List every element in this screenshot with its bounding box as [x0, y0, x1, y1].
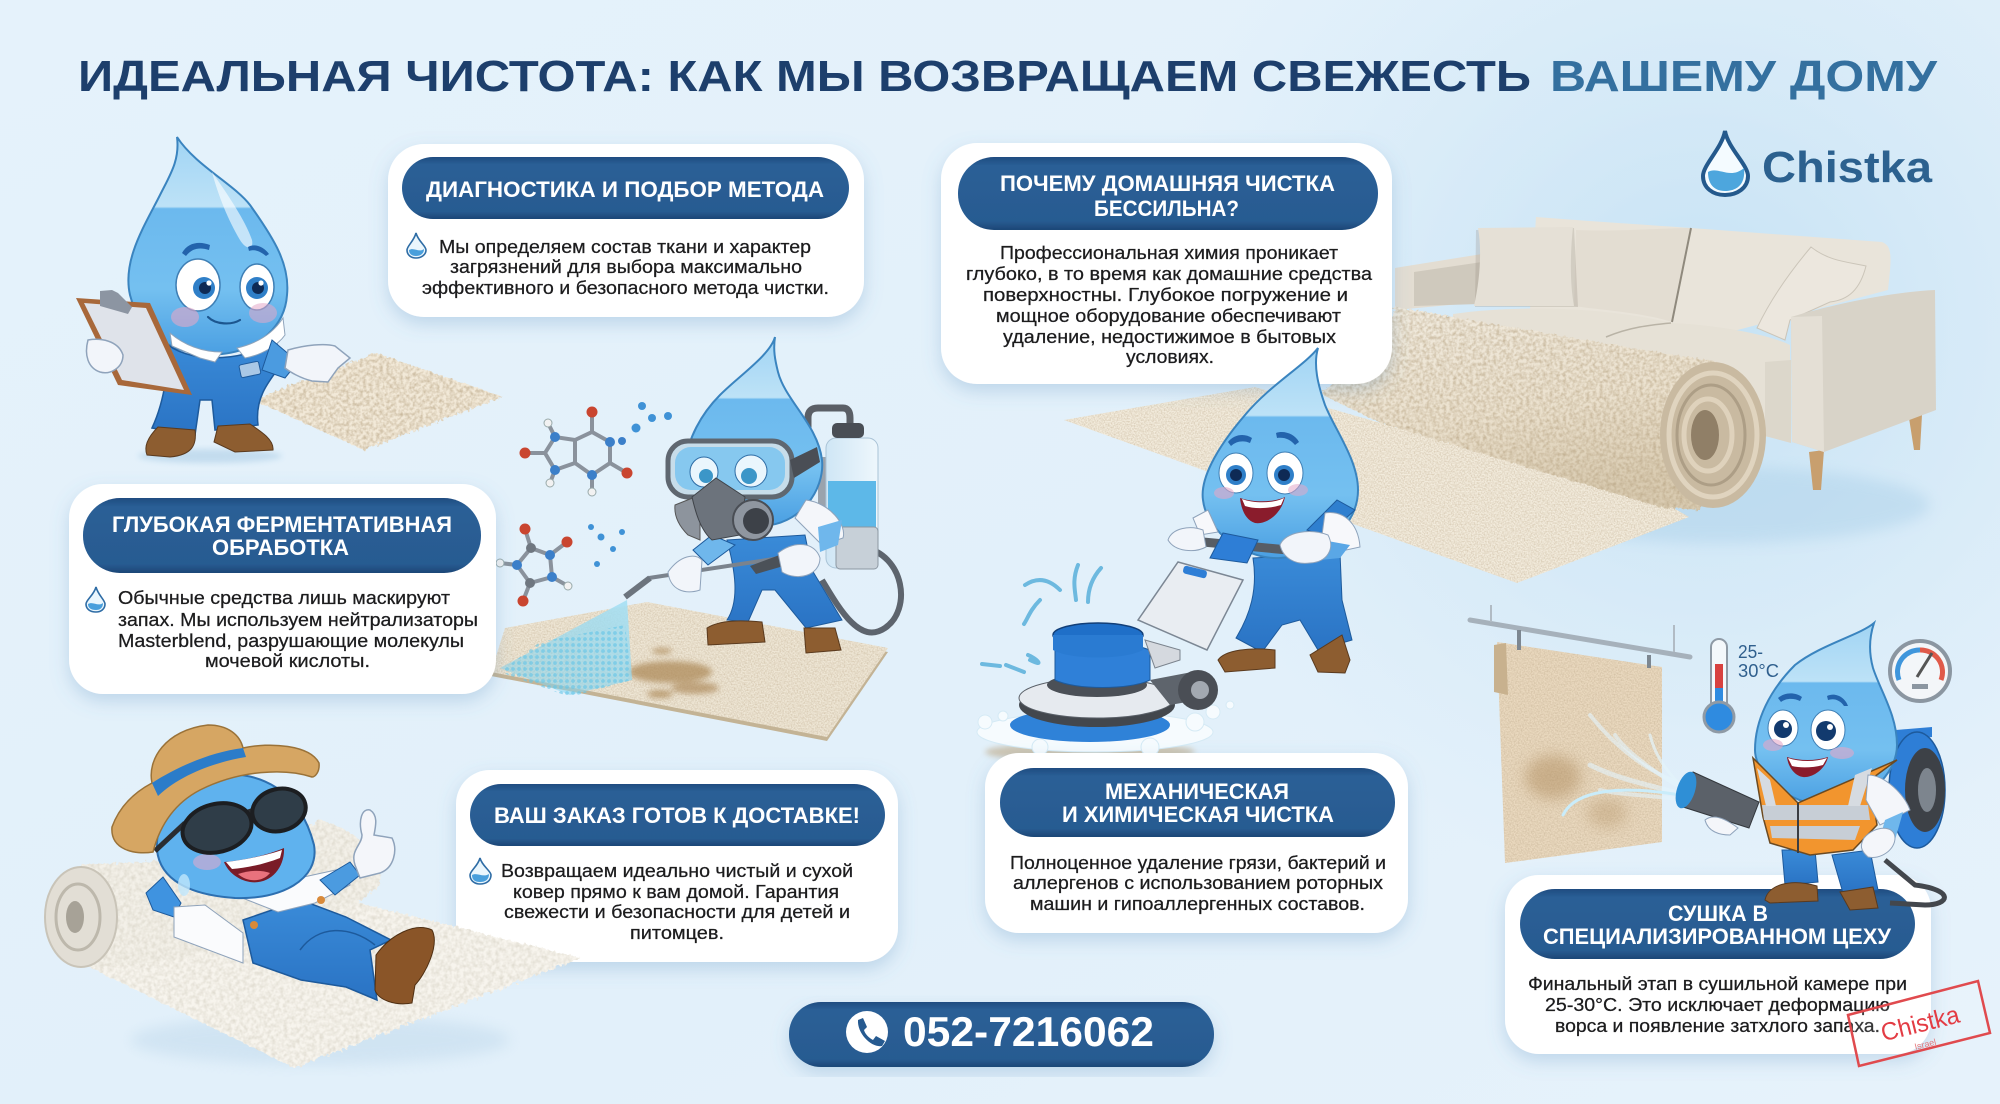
goggles and respirator [668, 441, 820, 540]
body text: питомцев. [630, 923, 724, 943]
clipboard [76, 290, 192, 395]
body text: Финальный этап в сушильной камере при [1528, 974, 1907, 994]
body text: Masterblend, разрушающие молекулы [118, 631, 464, 651]
molecule: upper [520, 406, 632, 496]
icon: water drop [470, 858, 491, 884]
drop body [1203, 348, 1358, 558]
thermometer: 30°C [1738, 661, 1779, 681]
body text: Полноценное удаление грязи, бактерий и [1010, 853, 1386, 873]
glove holding clipboard [86, 339, 123, 373]
boot sole [375, 928, 434, 1004]
face [1214, 432, 1308, 523]
heading pill [1000, 768, 1395, 837]
body text [966, 243, 1373, 367]
heading pill [958, 157, 1378, 230]
foam and dirt [977, 701, 1234, 762]
body text: Обычные средства лишь маскируют [118, 588, 450, 608]
body text: ковер прямо к вам домой. Гарантия [513, 882, 839, 902]
heading pill: МЕХАНИЧЕСКАЯ [1105, 779, 1289, 804]
heading pill: ПОЧЕМУ ДОМАШНЯЯ ЧИСТКА [1000, 171, 1335, 196]
molecule: lower [496, 524, 572, 606]
title: ИДЕАЛЬНАЯ ЧИСТОТА: КАК МЫ ВОЗВРАЩАЕМ СВЕЖЕСТЬ [78, 52, 1531, 101]
blue arm behind head [146, 877, 181, 917]
body text: аллергенов с использованием роторных [1013, 873, 1383, 893]
stamp: Chistka: Chistka [1878, 1001, 1963, 1047]
hanging rug [1497, 642, 1662, 863]
glove pointing [285, 345, 350, 382]
mouth [224, 848, 284, 882]
small rug under clipboard mascot [253, 353, 503, 450]
phone button: 052-7216062 [903, 1008, 1154, 1055]
stamp: Chistka: Israel [1913, 1037, 1937, 1052]
roll spiral end [1660, 362, 1766, 508]
icon: phone [846, 1011, 888, 1053]
heading pill [402, 157, 849, 219]
face [1763, 693, 1854, 777]
rug under spraying mascot [491, 600, 888, 741]
floor machine [1019, 562, 1243, 727]
face [171, 243, 277, 327]
mascot: clipboard inspector [76, 137, 350, 463]
heading pill: ВАШ ЗАКАЗ ГОТОВ К ДОСТАВКЕ! [494, 803, 860, 828]
uniform [152, 318, 298, 435]
hose behind [1885, 860, 1944, 905]
stamp: Chistka [1848, 981, 1990, 1066]
body text: свежести и безопасности для детей и [504, 902, 850, 922]
illustration: sofa and rolled carpet [1064, 217, 1936, 583]
body text: машин и гипоаллергенных составов. [1030, 894, 1365, 914]
body text [118, 588, 478, 671]
panel: enzyme treatment [69, 484, 496, 694]
stain [628, 648, 719, 698]
body text: удаление, недостижимое в бытовых [1003, 327, 1336, 347]
drying rod and hanging rug [1470, 605, 1690, 863]
heading pill: СУШКА В [1668, 901, 1768, 926]
title: ВАШЕМУ ДОМУ [1550, 52, 1938, 101]
panel: diagnostics [388, 144, 864, 317]
body text: глубоко, в то время как домашние средства [966, 264, 1373, 284]
body text: эффективного и безопасного метода чистки. [422, 278, 829, 298]
hose [822, 547, 901, 632]
backpack tank [808, 408, 878, 569]
mascot: drying with blower [1672, 623, 1945, 910]
body text: условиях. [1126, 347, 1214, 367]
boots [146, 424, 273, 457]
head [157, 774, 315, 898]
heading pill: И ХИМИЧЕСКАЯ ЧИСТКА [1062, 802, 1334, 827]
logo: Chistka [1703, 131, 1933, 195]
blue fan [1889, 727, 1945, 848]
drop body [128, 137, 287, 354]
heading pill: ГЛУБОКАЯ ФЕРМЕНТАТИВНАЯ [112, 512, 452, 537]
mascot: relaxing on clean rug [45, 725, 581, 1068]
body text: запах. Мы используем нейтрализаторы [118, 610, 478, 630]
arm and glove [1861, 775, 1910, 858]
heading pill: ДИАГНОСТИКА И ПОДБОР МЕТОДА [426, 177, 824, 202]
panel: drying [1505, 875, 1931, 1054]
orange safety vest [1753, 758, 1897, 855]
splashes [982, 565, 1101, 672]
drop body [1755, 623, 1897, 805]
body text [422, 237, 829, 298]
body text: загрязнений для выбора максимально [450, 257, 802, 277]
overalls [243, 900, 391, 1000]
mascot: spraying with respirator [625, 337, 901, 653]
body text: Мы определяем состав ткани и характер [439, 237, 811, 257]
body text [1528, 974, 1907, 1036]
machine white housing [1138, 562, 1243, 650]
logo: Chistka: Chistka [1762, 143, 1933, 192]
body text: мощное оборудование обеспечивают [996, 306, 1341, 326]
body text: Возвращаем идеально чистый и сухой [501, 861, 853, 881]
carpet roll [1319, 307, 1718, 510]
sofa [1395, 217, 1936, 490]
body text: Профессиональная химия проникает [1000, 243, 1338, 263]
legs [1218, 553, 1352, 673]
arms and handle [1168, 500, 1360, 563]
straw hat [112, 725, 319, 853]
body text: ворса и появление затхлого запаха. [1555, 1016, 1880, 1036]
heading pill: СПЕЦИАЛИЗИРОВАННОМ ЦЕХУ [1543, 924, 1891, 949]
drop head [686, 337, 822, 526]
sunglasses [155, 783, 310, 860]
white rug [45, 820, 581, 1068]
body text: поверхностны. Глубокое погружение и [983, 285, 1348, 305]
spray cone [500, 600, 632, 695]
thermometer: 25- [1738, 642, 1763, 662]
body text: мочевой кислоты. [205, 651, 370, 671]
panel: delivery [456, 770, 898, 962]
body text [501, 861, 853, 943]
white sleeve and shirt [174, 905, 243, 963]
panel: mechanical and chemical cleaning [985, 753, 1408, 933]
legs and torso [707, 535, 842, 653]
icon: water drop [86, 587, 105, 612]
mascot: rotary machine operator [977, 348, 1360, 762]
phone button [789, 1002, 1214, 1067]
heading pill: ОБРАБОТКА [212, 535, 349, 560]
heading pill [83, 498, 481, 573]
heading pill [470, 784, 885, 846]
heading pill: БЕССИЛЬНА? [1094, 196, 1239, 221]
blower tube [1672, 769, 1759, 835]
panel: why home cleaning fails [941, 143, 1392, 384]
body text: 25-30°C. Это исключает деформацию [1545, 995, 1890, 1015]
icon: water drop [407, 233, 426, 258]
pressure gauge [1890, 641, 1950, 701]
blue particles [588, 402, 672, 567]
thumbs up glove [320, 810, 395, 895]
thermometer [1704, 639, 1779, 732]
air stream [1563, 715, 1685, 815]
legs and boots [1765, 850, 1878, 910]
heading pill [1520, 889, 1915, 959]
body text [1010, 853, 1386, 914]
arms and gloves [625, 500, 844, 597]
carpet flat part [1064, 387, 1689, 583]
